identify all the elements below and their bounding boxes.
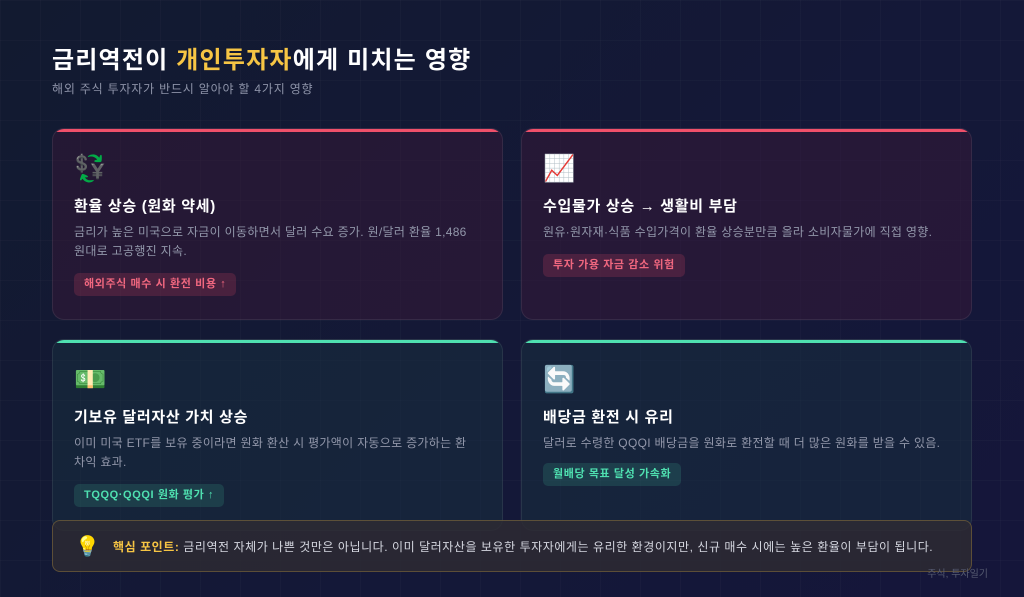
heading: 환율 상승 (원화 약세) [74, 198, 216, 215]
description: 달러로 수령한 QQQI 배당금을 원화로 환전할 때 더 많은 원화를 받을 수 있음. [543, 436, 940, 450]
description: 이미 미국 ETF를 보유 중이라면 원화 환산 시 평가액이 자동으로 증가하는 환차익 효과. [74, 436, 466, 469]
panel: dividends [521, 339, 972, 531]
description: 금리가 높은 미국으로 자금이 이동하면서 달러 수요 증가. 원/달러 환율 1,486 원대로 고공행진 지속. [74, 225, 467, 258]
icon: currency exchange: 💱 [74, 153, 106, 183]
icon: money: 💵 [74, 364, 106, 394]
tag [543, 254, 685, 277]
heading: 기보유 달러자산 가치 상승 [74, 409, 248, 426]
description: 원유·원자재·식품 수입가격이 환율 상승분만큼 올라 소비자물가에 직접 영향. [543, 225, 932, 239]
panel: exchange rate [52, 128, 503, 320]
callout: key point [52, 520, 972, 572]
callout: key point: 💡 [75, 536, 100, 558]
footer: 주식, 투자일기 [927, 569, 988, 580]
tag [74, 273, 236, 296]
title: 금리역전이 개인투자자에게 미치는 영향 [52, 47, 471, 74]
heading: 수입물가 상승 → 생활비 부담 [543, 198, 738, 215]
tag: 월배당 목표 달성 가속화 [553, 468, 671, 480]
icon: refresh: 🔄 [543, 364, 575, 394]
tag [74, 484, 224, 507]
icon: chart up: 📈 [543, 153, 575, 183]
panel: import prices [521, 128, 972, 320]
subtitle: 해외 주식 투자자가 반드시 알아야 할 4가지 영향 [52, 82, 313, 96]
heading: 배당금 환전 시 유리 [543, 409, 674, 426]
panel: dollar assets [52, 339, 503, 531]
tag [543, 463, 681, 486]
tag: 투자 가용 자금 감소 위험 [553, 259, 675, 271]
tag: TQQQ·QQQI 원화 평가 ↑ [84, 489, 214, 501]
callout: key point: 핵심 포인트: 금리역전 자체가 나쁜 것만은 아닙니다. 이미 달러자산을 보유한 투자자에게는 유리한 환경이지만, 신규 매수 시에는 높은 환율이 부담이 됩니다. [113, 540, 933, 554]
tag: 해외주식 매수 시 환전 비용 ↑ [84, 278, 226, 290]
